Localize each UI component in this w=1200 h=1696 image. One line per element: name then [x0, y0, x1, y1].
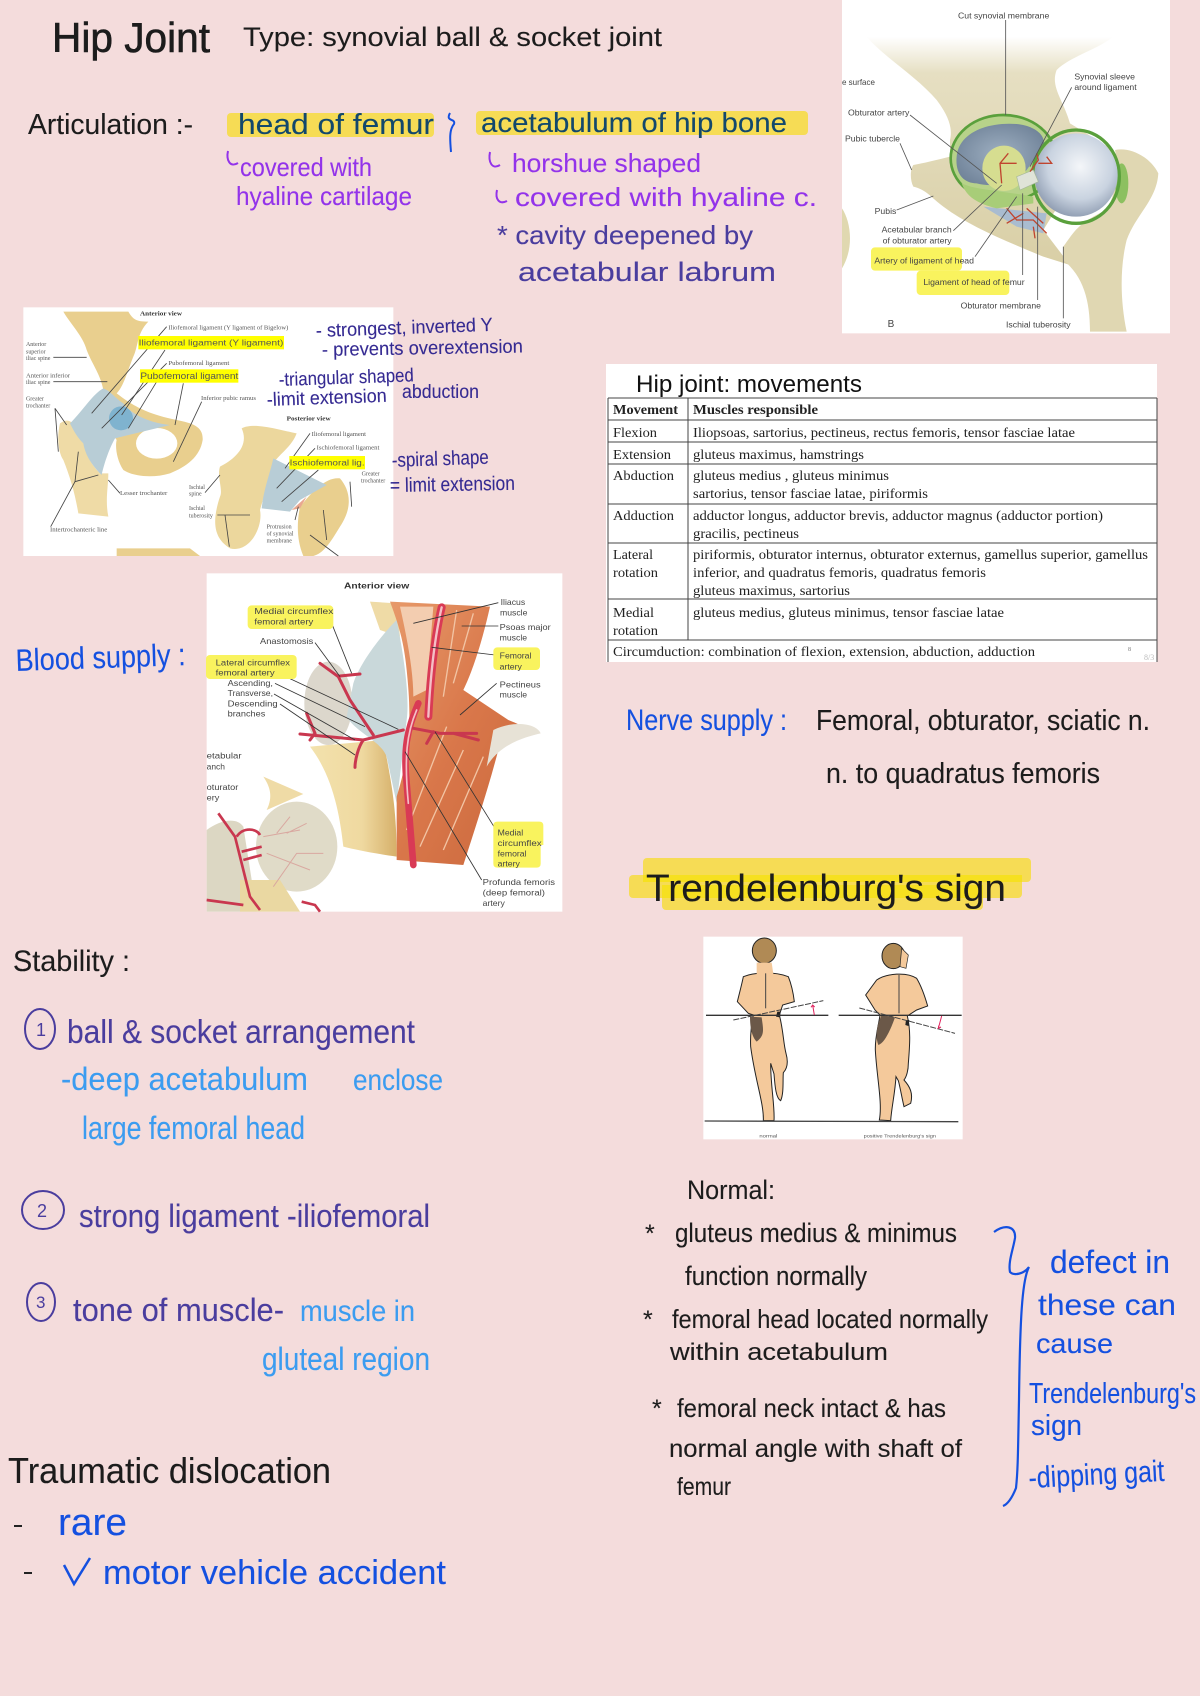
view and structure labels: Inferior pubic ramus — [201, 395, 257, 402]
note: defect can cause Trendelenburg's sign: these can — [1038, 1289, 1176, 1322]
view and structure labels: Greater — [26, 397, 44, 403]
point 1: ball and socket arrangement: ball & socket arrangement — [67, 1013, 415, 1050]
note: deep acetabulum encloses large femoral head: large femoral head — [82, 1110, 305, 1146]
point 3: tone of muscle: muscle in — [300, 1295, 415, 1328]
note: femoral neck intact: normal angle with shaft of — [669, 1435, 962, 1463]
labels: Psoas major — [500, 622, 551, 632]
labels: Acetabular branch — [882, 225, 952, 235]
illustration: Trendelenburg test: positive Trendelenburg's sign — [864, 1133, 936, 1138]
note: femoral head located normally: * — [643, 1306, 653, 1334]
figure: normal — [737, 938, 794, 1121]
point 1: ball and socket arrangement: 1 — [36, 1020, 46, 1040]
note: cavity deepened by acetabular labrum: * cavity deepened by — [497, 220, 753, 250]
labels: Ascending, — [228, 678, 273, 688]
table: hip joint movements: gluteus medius , gluteus minimus — [693, 469, 889, 484]
labels: Femoral — [500, 651, 531, 661]
view and structure labels: spine — [189, 492, 202, 498]
posterior view bones — [117, 426, 349, 556]
labels: circumflex — [498, 838, 542, 848]
stability section — [13, 945, 443, 1377]
view and structure labels: Anterior inferior — [26, 372, 70, 379]
point 3: tone of muscle: 3 — [36, 1293, 45, 1312]
table: hip joint movements: 8/3 — [1144, 653, 1154, 662]
view and structure labels: Iliofemoral ligament (Y ligament of Bigelow) — [168, 324, 288, 331]
table: hip joint movements: sartorius, tensor fasciae latae, piriformis — [693, 487, 928, 502]
illustration: Trendelenburg test: normal — [759, 1133, 777, 1138]
nerve supply section — [626, 704, 1150, 790]
view and structure labels: Ischial — [189, 485, 205, 491]
table: hip joint movements: Medial — [613, 606, 654, 621]
labels: Transverse, — [228, 688, 273, 698]
table: hip joint movements: Circumduction: combination of flexion, extension, abduction, adduction — [613, 645, 1035, 660]
table: hip joint movements: gracilis, pectineus — [693, 527, 799, 542]
note: nerve to quadratus femoris: n. to quadratus femoris — [826, 758, 1100, 790]
table: hip joint movements: Movement — [613, 403, 678, 418]
labels — [207, 580, 556, 908]
labels — [842, 10, 1137, 330]
articulation section — [28, 107, 817, 287]
point 2: strong ligament: strong ligament -iliofemoral — [79, 1198, 430, 1234]
articulation label: Articulation :- — [28, 109, 193, 141]
labels: of obturator artery — [883, 235, 952, 245]
illustration: acetabulum and femoral head — [842, 0, 1170, 333]
highlight: iliofemoral ligament — [138, 336, 284, 349]
table: hip joint movements: Lateral — [613, 548, 653, 563]
labels: Artery of ligament of head — [874, 255, 974, 265]
table: hip joint movements: rotation — [613, 566, 658, 581]
point 2: strong ligament: 2 — [37, 1201, 47, 1221]
table: hip joint movements — [606, 364, 1157, 662]
table: hip joint movements: 8 — [1128, 647, 1131, 653]
arterial branches — [300, 663, 478, 767]
note: strongest, inverted Y: - strongest, inverted Y — [315, 315, 493, 342]
heading: stability: Stability : — [13, 945, 130, 978]
heading: traumatic dislocation: Traumatic dislocation — [8, 1450, 331, 1491]
labels: muscle — [500, 633, 527, 643]
view and structure labels: Intertrochanteric line — [50, 528, 108, 534]
joint type note: Type: synovial ball & socket joint — [243, 22, 663, 52]
view and structure labels: Iliofemoral ligament — [312, 431, 366, 438]
view and structure labels: Anterior — [26, 342, 46, 348]
femoral artery — [405, 607, 442, 865]
labels: around ligament — [1074, 82, 1137, 92]
note: covered with hyaline cartilage: hyaline cartilage — [236, 181, 412, 211]
highlight: ligament of head of femur — [917, 271, 1009, 295]
highlight: ischiofemoral ligament: Ischiofemoral lig. — [290, 458, 365, 468]
labels: muscle — [500, 607, 528, 617]
highlight: pubofemoral ligament — [140, 369, 239, 383]
table: hip joint movements: rotation — [613, 624, 658, 639]
highlight: medial circumflex femoral artery — [248, 605, 333, 629]
labels: artery — [500, 661, 522, 671]
view and structure labels — [26, 311, 385, 544]
highlight: pubofemoral ligament: Pubofemoral ligament — [140, 371, 239, 381]
labels: anch — [207, 761, 225, 771]
labels: Ischial tuberosity — [1006, 319, 1071, 329]
highlight: medial circumflex femoral artery, right — [493, 822, 543, 868]
note: covered with hyaline cartilage — [227, 151, 412, 211]
heading: normal: Normal: — [687, 1175, 775, 1205]
lower-left inset bone — [207, 777, 337, 912]
note: limit extension posterior: = limit extension — [390, 473, 515, 497]
table: hip joint movements: Extension — [613, 448, 671, 463]
note: spiral shape: -spiral shape — [391, 447, 489, 472]
title: Hip Joint — [52, 14, 210, 61]
heading: blood supply: Blood supply : — [15, 637, 186, 678]
view and structure labels: iliac spine — [26, 356, 51, 362]
highlight: head of femur: head of femur — [238, 109, 434, 141]
note: gluteus medius and minimus — [645, 1218, 957, 1291]
labels: Lateral circumflex — [216, 657, 291, 667]
table: hip joint movements: gluteus maximus, sartorius — [693, 584, 850, 599]
point 2: strong ligament — [22, 1191, 430, 1234]
note: limit extension: -limit extension — [266, 386, 387, 411]
labels: Obturator membrane — [961, 300, 1041, 310]
view and structure labels: trochanter — [26, 404, 50, 410]
table title: Hip joint: movements — [636, 371, 862, 398]
labels: Profunda femoris — [483, 877, 556, 887]
note: cavity deepened by acetabular labrum: acetabular labrum — [518, 257, 776, 287]
note: defect can cause Trendelenburg's sign: defect in — [1050, 1244, 1170, 1280]
table: hip joint movements: Abduction — [613, 469, 674, 484]
labels: Descending — [228, 699, 278, 709]
note: prevents overextension: - prevents overextension — [322, 336, 523, 361]
labels: Cut synovial membrane — [958, 10, 1050, 20]
highlight: acetabulum of hip bone: acetabulum of hip bone — [481, 107, 787, 138]
labels: branches — [228, 709, 266, 719]
note: gluteus medius and minimus: * — [645, 1220, 655, 1248]
figure: positive sign — [866, 943, 928, 1121]
note: femoral neck intact: femur — [677, 1473, 731, 1501]
note: gluteus medius and minimus: function normally — [685, 1261, 867, 1291]
labels: artery — [498, 859, 520, 869]
highlight: ischiofemoral ligament — [289, 456, 365, 469]
heading: nerve supply: Nerve supply : — [626, 704, 787, 737]
labels: Medial — [498, 827, 523, 837]
view and structure labels: Ischiofemoral ligament — [317, 444, 380, 451]
note: abduction: abduction — [402, 382, 479, 403]
note: defect can cause Trendelenburg's sign: cause — [1036, 1328, 1113, 1359]
point 3: tone of muscle: tone of muscle- — [73, 1292, 284, 1328]
view and structure labels: of synovial — [267, 531, 294, 538]
labels: Anastomosis — [260, 636, 314, 646]
connector: and — [449, 113, 454, 152]
labels: Anterior view — [344, 580, 410, 590]
view and structure labels: Protrusion — [267, 524, 292, 530]
labels: artery — [483, 898, 505, 908]
labels: Iliacus — [501, 597, 526, 607]
note: covered with hyaline cartilage: covered with — [240, 152, 372, 182]
table: hip joint movements: gluteus maximus, hamstrings — [693, 448, 864, 463]
labels: oturator — [207, 782, 238, 792]
heading: Trendelenburg's sign with highlight: Trendelenburg's sign — [646, 868, 1006, 910]
traumatic dislocation section — [8, 1450, 447, 1592]
highlight: artery of ligament of head — [871, 247, 962, 271]
labels: Pubis — [875, 206, 897, 216]
labels: muscle — [500, 690, 527, 700]
labels: femoral — [498, 849, 527, 859]
labels: Pectineus — [500, 679, 541, 689]
table: hip joint movements: inferior, and quadratus femoris, quadratus femoris — [693, 566, 986, 581]
table: hip joint movements: gluteus medius, gluteus minimus, tensor fasciae latae — [693, 606, 1004, 621]
view and structure labels: tuberosity — [189, 513, 213, 519]
labels: etabular — [207, 751, 242, 761]
table: hip joint movements: Adduction — [613, 509, 674, 524]
point 3: tone of muscle: gluteal region — [262, 1341, 430, 1377]
note: gluteus medius and minimus: gluteus medius & minimus — [675, 1218, 957, 1248]
item: motor vehicle accident: motor vehicle accident — [103, 1554, 447, 1592]
highlight: iliofemoral ligament: Iliofemoral ligament (Y ligament) — [139, 338, 283, 348]
illustration: arterial supply, anterior view — [206, 573, 562, 912]
anterior view bones — [58, 312, 203, 517]
labels: Obturator artery — [848, 108, 910, 118]
view and structure labels: superior — [26, 349, 46, 355]
view and structure labels: Ischial — [189, 506, 205, 512]
labels: ery — [207, 793, 220, 803]
labels: femoral artery — [254, 617, 314, 627]
note: femoral neck intact — [652, 1393, 962, 1501]
labels: (deep femoral) — [483, 888, 545, 898]
labels: Ligament of head of femur — [923, 277, 1025, 287]
view and structure labels: Greater — [362, 472, 380, 478]
note: horseshoe shaped: horshue shaped — [512, 148, 701, 178]
labels: Pubic tubercle — [845, 134, 900, 144]
table: hip joint movements: Flexion — [613, 426, 657, 441]
note: defect can cause Trendelenburg's sign — [1028, 1244, 1196, 1495]
handwritten ligament notes — [266, 315, 523, 497]
view and structure labels: trochanter — [361, 479, 385, 485]
note: covered with hyaline c.: covered with hyaline c. — [515, 182, 817, 212]
note: femoral neck intact: femoral neck intact & has — [677, 1393, 946, 1423]
illustration: hip ligaments anterior and posterior — [23, 307, 393, 556]
view and structure labels: Posterior view — [287, 417, 331, 423]
labels: Medial circumflex — [254, 606, 334, 616]
labels: B — [888, 319, 895, 330]
level lines and arrows — [705, 1001, 962, 1122]
highlight: lateral circumflex femoral artery — [206, 655, 297, 679]
view and structure labels: Lesser trochanter — [120, 491, 167, 497]
brace — [994, 1227, 1029, 1506]
illustration: Trendelenburg test — [703, 937, 963, 1139]
view and structure labels: membrane — [267, 538, 292, 544]
table: hip joint movements: Iliopsoas, sartorius, pectineus, rectus femoris, tensor fasciae latae — [693, 426, 1075, 441]
note: triangular shaped: -triangular shaped — [278, 365, 414, 391]
table: hip joint movements: Muscles responsible — [693, 403, 818, 418]
highlight: femoral artery — [493, 647, 540, 670]
note: deep acetabulum encloses large femoral head — [61, 1061, 443, 1146]
note: femoral head located normally: within acetabulum — [669, 1339, 888, 1366]
note: femoral head located normally — [643, 1304, 988, 1366]
note: deep acetabulum encloses large femoral head: -deep acetabulum — [61, 1061, 308, 1097]
note: defect can cause Trendelenburg's sign: -dipping gait — [1028, 1455, 1166, 1495]
note: femoral neck intact: * — [652, 1395, 662, 1423]
note: defect can cause Trendelenburg's sign: sign — [1031, 1410, 1082, 1442]
view and structure labels: iliac spine — [26, 380, 51, 386]
note: femoral head located normally: femoral head located normally — [672, 1304, 988, 1334]
note: cavity deepened by acetabular labrum — [497, 220, 776, 287]
normal criteria notes — [643, 1175, 988, 1501]
note: nerves: Femoral, obturator, sciatic n. — [816, 705, 1150, 737]
view and structure labels: Pubofemoral ligament — [168, 360, 230, 367]
labels: e surface — [842, 77, 875, 87]
note: deep acetabulum encloses large femoral head: enclose — [353, 1064, 443, 1097]
table: hip joint movements: piriformis, obturator internus, obturator externus, gamellus superior, gamellus — [693, 548, 1148, 563]
labels: Synovial sleeve — [1074, 71, 1135, 81]
item: rare — [14, 1502, 127, 1544]
view and structure labels: Anterior view — [140, 311, 182, 318]
point 3: tone of muscle — [27, 1283, 430, 1377]
item: rare: rare — [58, 1502, 127, 1544]
table: hip joint movements: adductor longus, adductor brevis, adductor magnus (adductor portion) — [693, 509, 1103, 524]
labels: femoral artery — [216, 667, 275, 677]
